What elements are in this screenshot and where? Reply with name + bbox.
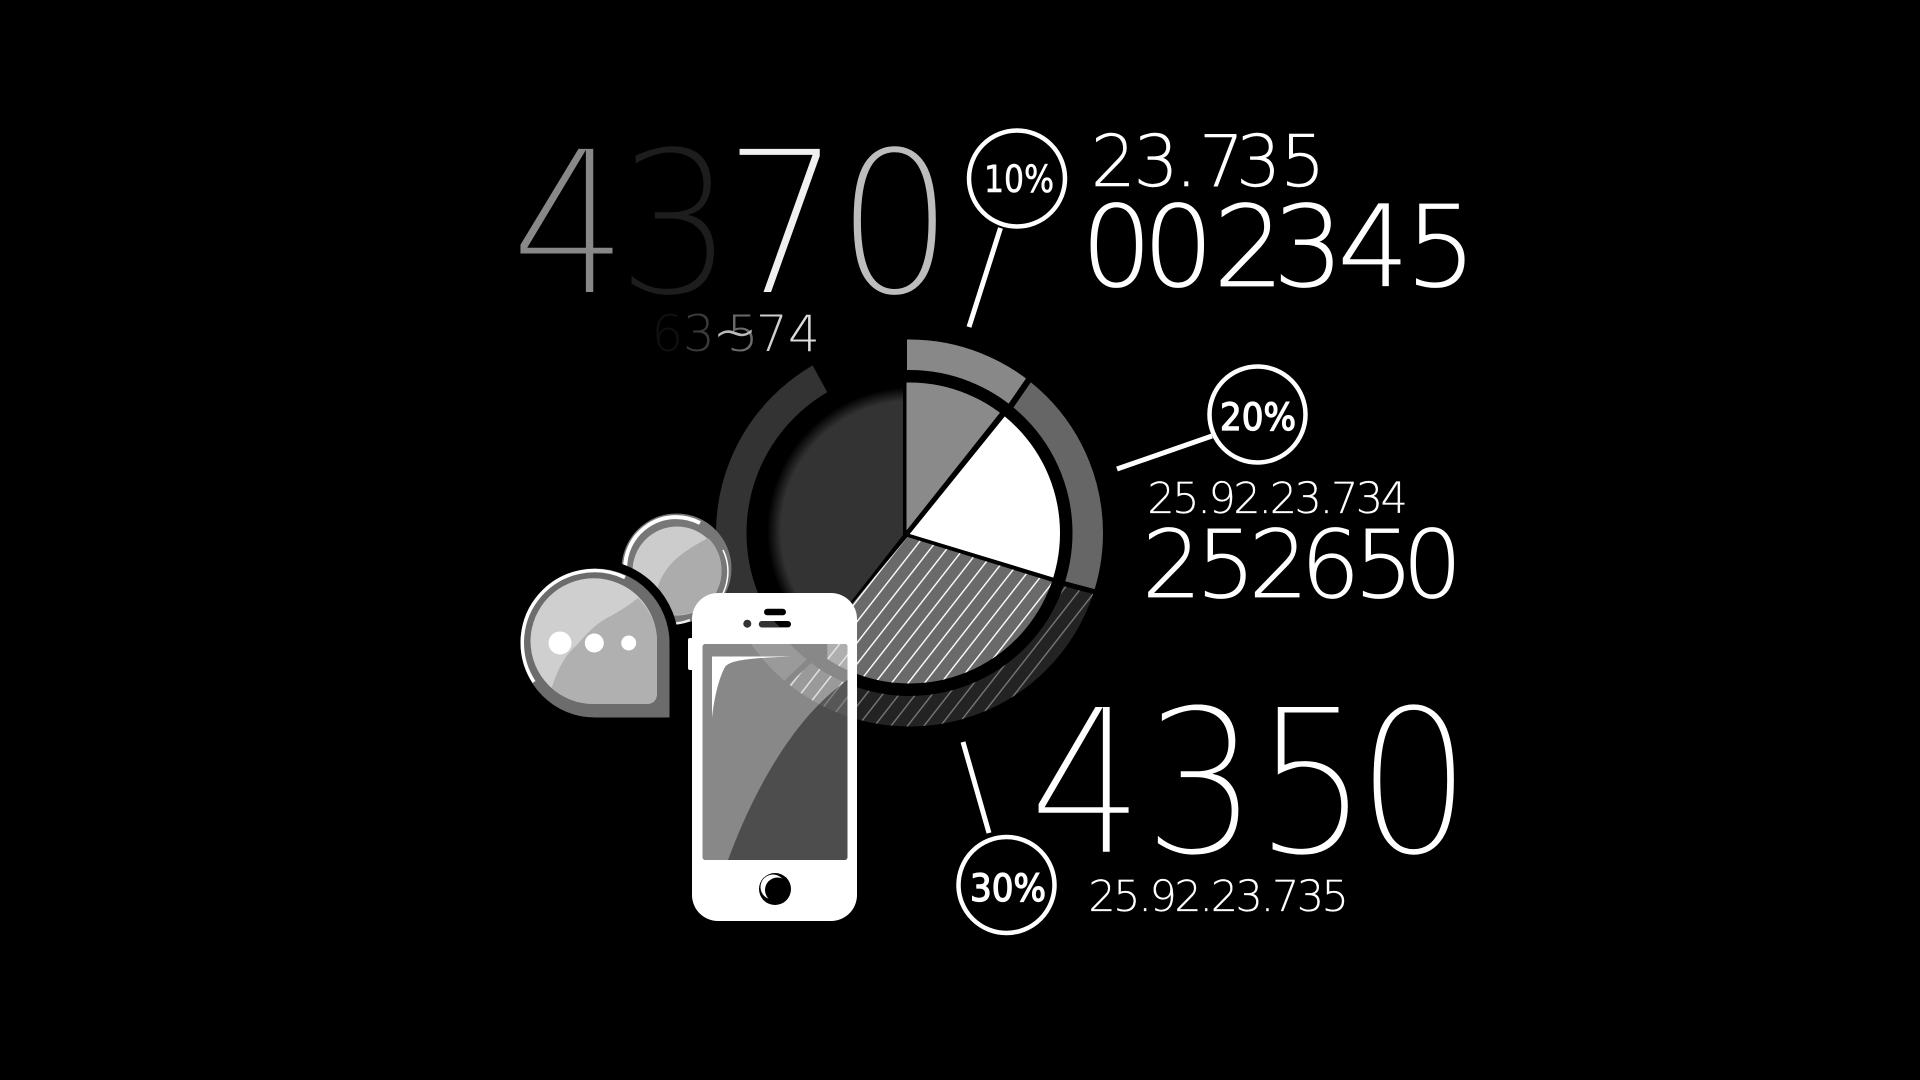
callout: 10%	[969, 130, 1065, 327]
big number: 4370: 4	[511, 110, 628, 341]
value: 25.92.23.735: 25.92.23.735	[1088, 872, 1349, 922]
phone screen	[702, 644, 848, 860]
value: 4350: 4350	[1029, 667, 1472, 901]
small number: 63~574: 6	[652, 305, 683, 363]
home button	[759, 873, 791, 905]
callout: 30%: 30%	[970, 867, 1046, 910]
value: 002345: 002345	[1081, 183, 1477, 313]
small number: 63~574	[652, 303, 820, 363]
small number: 63~574: 5	[727, 305, 758, 363]
donut ring chart	[731, 355, 1088, 711]
dots	[548, 632, 636, 654]
pie chart	[770, 382, 1060, 684]
icon: smartphone	[688, 593, 857, 921]
small number: 63~574: 4	[788, 305, 820, 363]
callout: 20%: 20%	[1220, 396, 1296, 439]
value: 25.92.23.734: 25.92.23.734	[1147, 474, 1408, 524]
small number: 63~574: ~	[713, 303, 757, 361]
screen glare	[712, 656, 792, 718]
small number: 63~574: 3	[683, 305, 715, 363]
callout: 10%: 10%	[984, 158, 1054, 201]
speaker	[764, 609, 786, 615]
big number: 4370: 3	[617, 110, 734, 341]
icon: small chat bubble	[622, 514, 732, 624]
big number: 4370: 7	[723, 110, 841, 341]
icon: large chat bubble	[520, 568, 670, 718]
value: 252650: 252650	[1142, 511, 1462, 620]
callout: 20%	[1117, 366, 1306, 469]
big number: 4370	[511, 110, 954, 341]
big number: 4370: 0	[836, 110, 954, 341]
small number: 63~574: 7	[756, 305, 788, 363]
value: 23.735: 23.735	[1091, 120, 1325, 203]
callout: 30%	[958, 742, 1054, 933]
